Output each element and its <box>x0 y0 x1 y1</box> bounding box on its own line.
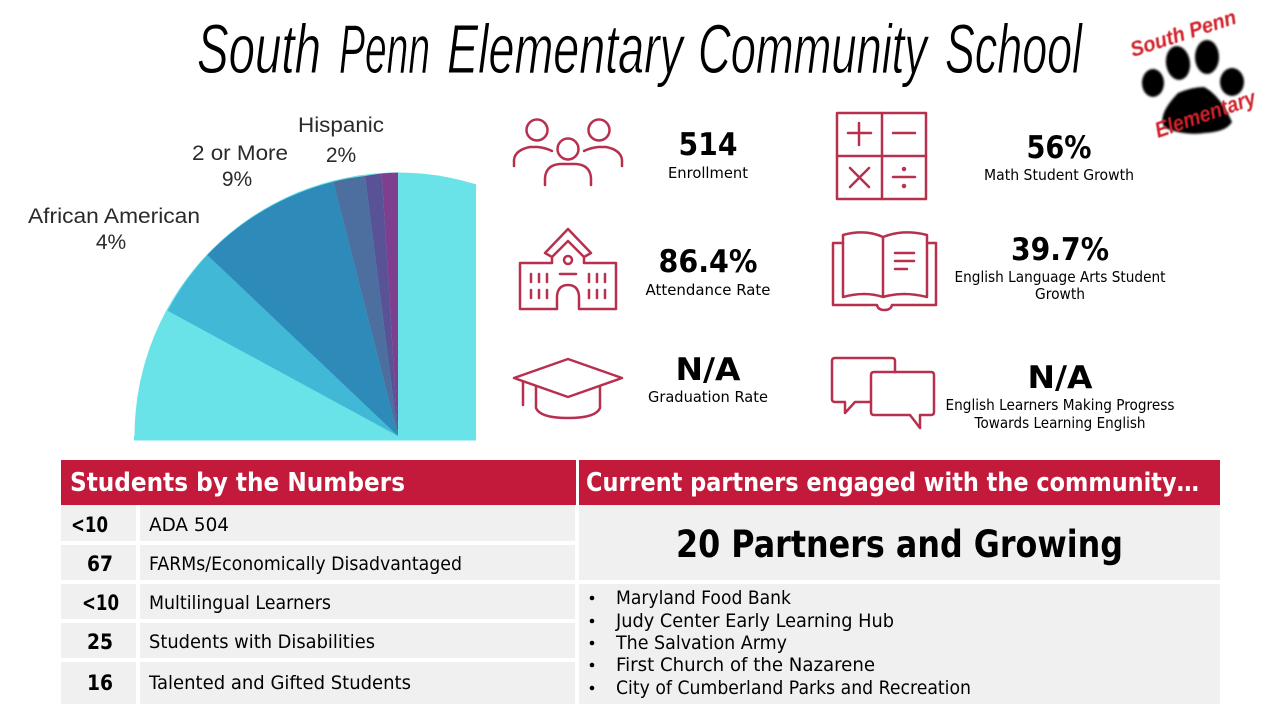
label: Hispanic: 2% <box>326 144 356 167</box>
stat: graduation <box>648 352 768 406</box>
stat: math growth <box>984 130 1134 184</box>
title <box>197 10 1084 88</box>
stat: enrollment <box>668 127 748 182</box>
label: Hispanic: Hispanic <box>298 114 384 137</box>
label: 2 or More: 9% <box>222 168 252 191</box>
row: ADA 504: <10 <box>71 513 108 537</box>
row: FARMs: FARMs/Economically Disadvantaged <box>149 553 462 575</box>
icon: South Penn paw logo: Elementary <box>1151 84 1260 143</box>
row: talented and gifted: Talented and Gifted Students <box>148 672 411 694</box>
label: 2 or More <box>192 142 288 191</box>
heading: current partners: Current partners engaged with the community… <box>586 468 1199 498</box>
title: Elementary <box>447 10 686 88</box>
list: partners: Maryland Food Bank <box>616 587 791 609</box>
stat: ELA growth <box>954 232 1166 303</box>
stat: attendance <box>646 244 770 299</box>
row: multilingual learners: Multilingual Learners <box>149 592 331 614</box>
stat: English learners <box>946 360 1175 432</box>
icon: South Penn paw logo <box>1127 6 1260 143</box>
label: African American: 4% <box>96 231 126 254</box>
stat: math growth: Math Student Growth <box>984 166 1134 184</box>
row: students with disabilities: Students with Disabilities <box>149 631 375 653</box>
row: FARMs: 67 <box>87 552 113 576</box>
callout: 20 partners and growing <box>579 505 1220 580</box>
row: talented and gifted <box>61 662 575 704</box>
label: 2 or More: 2 or More <box>192 142 288 165</box>
title: Penn <box>339 10 430 88</box>
stat: English learners: English Learners Making Progress <box>946 396 1175 414</box>
icon: graduation cap <box>514 359 622 418</box>
row: FARMs <box>61 545 575 580</box>
stat: ELA growth: 39.7% <box>1011 232 1109 268</box>
stat: graduation: Graduation Rate <box>648 388 768 406</box>
icon: speech bubbles <box>832 358 934 428</box>
stat: ELA growth: Growth <box>1035 285 1085 303</box>
stat: enrollment: 514 <box>678 127 738 163</box>
stat: ELA growth: English Language Arts Student <box>954 268 1166 286</box>
stat: math growth: 56% <box>1026 130 1092 166</box>
stat: attendance: Attendance Rate <box>646 281 770 299</box>
title: South <box>197 10 321 88</box>
stat: English learners: N/A <box>1028 360 1093 396</box>
heading: students by the numbers: Students by the Numbers <box>70 468 405 498</box>
row: students with disabilities: 25 <box>87 630 113 654</box>
icon: school building <box>520 229 616 309</box>
stat: enrollment: Enrollment <box>668 164 748 182</box>
icon: people <box>514 120 622 185</box>
row: students with disabilities <box>61 623 575 658</box>
callout: 20 partners and growing: 20 Partners and Growing <box>676 523 1123 566</box>
row: multilingual learners <box>61 584 575 619</box>
stat: graduation: N/A <box>676 352 741 388</box>
panel: current partners <box>579 460 1220 704</box>
list: partners: City of Cumberland Parks and Recreation <box>616 677 971 699</box>
row: ADA 504: ADA 504 <box>149 514 229 536</box>
label: African American: African American <box>28 205 200 228</box>
table: students by the numbers <box>61 460 576 704</box>
row: multilingual learners: <10 <box>82 591 119 615</box>
list: partners: The Salvation Army <box>615 632 787 654</box>
list: partners: Judy Center Early Learning Hub <box>615 610 894 632</box>
list: partners: First Church of the Nazarene <box>616 654 875 676</box>
row: talented and gifted: 16 <box>87 671 113 695</box>
label: African American <box>28 205 200 254</box>
icon: South Penn paw logo: South Penn <box>1127 6 1239 62</box>
label: Hispanic <box>298 114 384 167</box>
title: Community <box>698 10 930 88</box>
heading: students by the numbers <box>61 460 576 505</box>
list: partners <box>579 584 1220 704</box>
stat: attendance: 86.4% <box>658 244 758 280</box>
stat: English learners: Towards Learning English <box>974 414 1146 432</box>
title: School <box>945 10 1084 88</box>
heading: current partners <box>579 460 1220 505</box>
icon: open book <box>833 232 936 310</box>
row: ADA 504 <box>61 505 575 541</box>
icon: math grid <box>837 113 926 199</box>
pie chart: student demographics <box>28 116 476 440</box>
